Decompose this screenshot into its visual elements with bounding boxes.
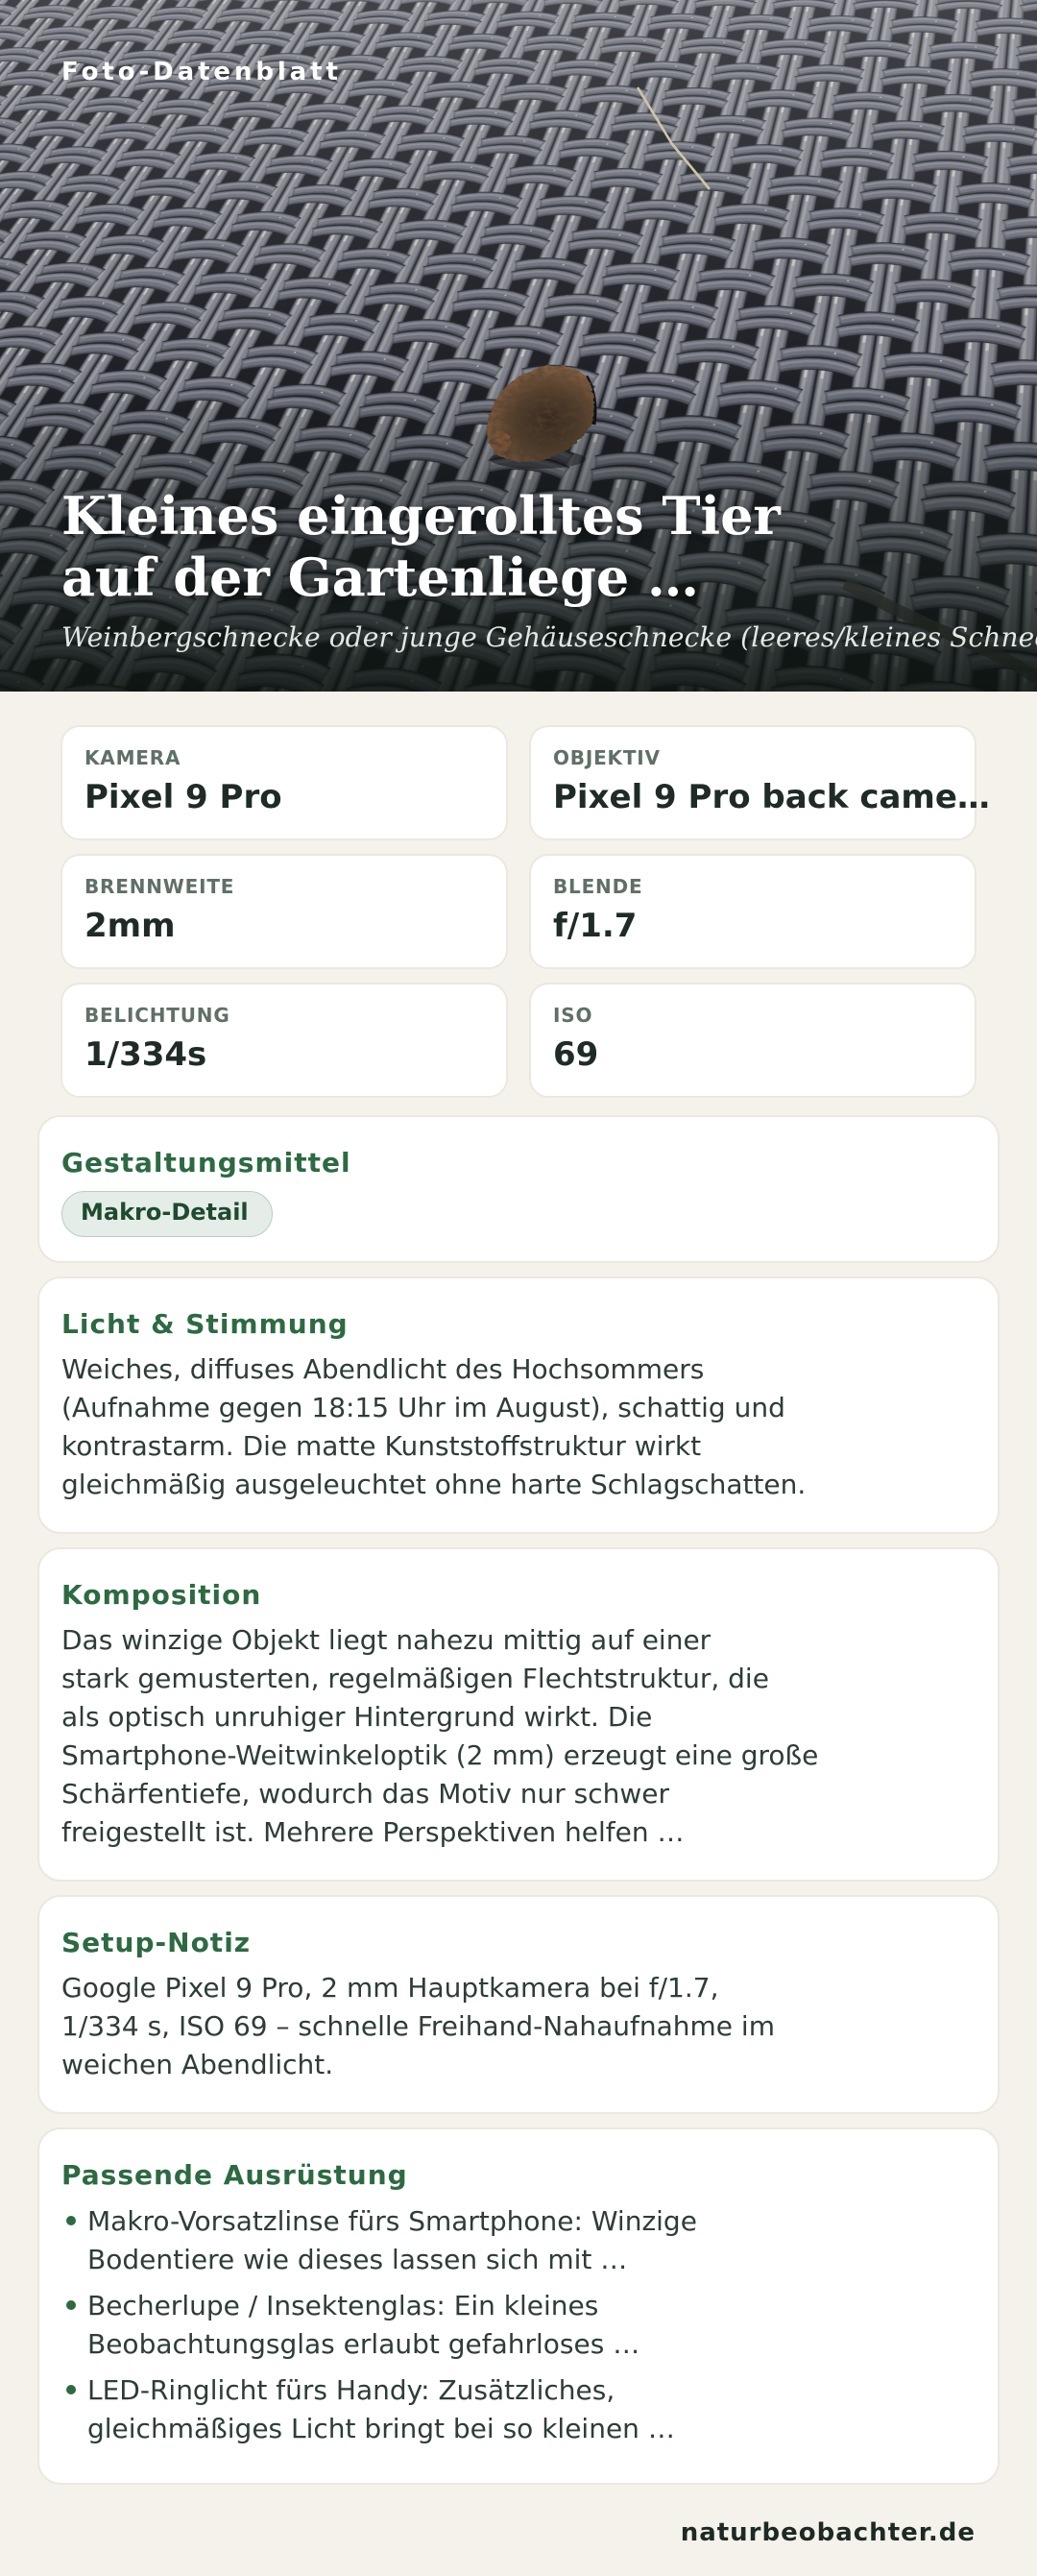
photo lighting haze — [0, 0, 1037, 692]
spec card: Brennweite — [60, 854, 508, 969]
spec card: Objektiv: OBJEKTIV — [553, 746, 661, 769]
heading: Komposition — [61, 1579, 261, 1611]
heading: Setup-Notiz — [61, 1927, 251, 1958]
heading: Passende Ausrüstung — [61, 2159, 408, 2191]
tag pill — [61, 1191, 273, 1237]
body text: als optisch unruhiger Hintergrund wirkt. Die — [61, 1701, 652, 1733]
spec card: Objektiv — [529, 725, 977, 840]
spec card: ISO: ISO — [553, 1004, 592, 1027]
list item 1: Bodentiere wie dieses lassen sich mit … — [87, 2244, 627, 2275]
heading: Licht & Stimmung — [61, 1308, 349, 1340]
tag pill: Makro-Detail — [81, 1199, 249, 1226]
body text: Weiches, diffuses Abendlicht des Hochsommers — [61, 1353, 704, 1385]
body text: Google Pixel 9 Pro, 2 mm Hauptkamera bei f/1.7, — [61, 1972, 718, 2004]
body text: gleichmäßig ausgeleuchtet ohne harte Schlagschatten. — [61, 1469, 806, 1500]
bullet marker 1 — [66, 2216, 76, 2225]
list item 1: Makro-Vorsatzlinse fürs Smartphone: Winzige — [87, 2205, 697, 2237]
panel: Passende Ausrüstung — [37, 2127, 1000, 2485]
body text: (Aufnahme gegen 18:15 Uhr im August), schattig und — [61, 1392, 785, 1423]
body text: freigestellt ist. Mehrere Perspektiven helfen … — [61, 1816, 685, 1848]
footer brand: naturbeobachter.de — [681, 2518, 976, 2547]
spec card: Belichtung: BELICHTUNG — [84, 1004, 230, 1027]
spec card: Blende: f/1.7 — [553, 907, 637, 945]
spec card: Blende: BLENDE — [553, 875, 642, 898]
photo subject: snail shell and straw — [486, 86, 1035, 684]
title: Kleines eingerolltes Tier — [61, 485, 781, 547]
list item 3: gleichmäßiges Licht bringt bei so kleinen … — [87, 2413, 675, 2444]
spec card: Objektiv: Pixel 9 Pro back came… — [553, 778, 990, 816]
spec card: ISO: 69 — [553, 1035, 598, 1074]
hero photo panel — [0, 0, 1037, 692]
spec card: Belichtung: 1/334s — [84, 1035, 206, 1074]
body text — [61, 1353, 806, 1500]
list item 1 — [87, 2205, 697, 2275]
photo: woven lounger texture — [0, 0, 1037, 692]
panel: Setup-Notiz — [37, 1895, 1000, 2114]
body text: Das winzige Objekt liegt nahezu mittig auf einer — [61, 1624, 711, 1656]
bullet marker 3 — [66, 2385, 76, 2394]
spec card: Belichtung — [60, 983, 508, 1098]
body text: Schärfentiefe, wodurch das Motiv nur schwer — [61, 1778, 669, 1810]
list item 2 — [87, 2290, 639, 2360]
body text — [61, 1624, 818, 1848]
body text: weichen Abendlicht. — [61, 2049, 333, 2080]
heading: Gestaltungsmittel — [61, 1147, 351, 1179]
spec card: Brennweite: BRENNWEITE — [84, 875, 234, 898]
spec card: Kamera — [60, 725, 508, 840]
spec card: ISO — [529, 983, 977, 1098]
list item 2: Becherlupe / Insektenglas: Ein kleines — [87, 2290, 598, 2321]
spec card: Kamera: Pixel 9 Pro — [84, 778, 282, 816]
panel: Komposition — [37, 1547, 1000, 1882]
list item 3: LED-Ringlicht fürs Handy: Zusätzliches, — [87, 2374, 615, 2406]
title: auf der Gartenliege … — [61, 547, 699, 608]
spec card: Brennweite: 2mm — [84, 907, 176, 945]
panel: Licht & Stimmung — [37, 1276, 1000, 1534]
body text: stark gemusterten, regelmäßigen Flechtstruktur, die — [61, 1663, 769, 1694]
body text: 1/334 s, ISO 69 – schnelle Freihand-Nahaufnahme im — [61, 2010, 775, 2042]
eyebrow: Foto-Datenblatt: Foto-Datenblatt — [61, 58, 342, 86]
bullet marker 2 — [66, 2300, 76, 2310]
dark gradient overlay — [0, 0, 1037, 692]
spec card: Kamera: KAMERA — [84, 746, 181, 769]
panel: Gestaltungsmittel — [37, 1115, 1000, 1263]
body text — [61, 1972, 775, 2080]
list item 3 — [87, 2374, 675, 2444]
list item 2: Beobachtungsglas erlaubt gefahrloses … — [87, 2328, 639, 2360]
body text: Smartphone-Weitwinkeloptik (2 mm) erzeugt eine große — [61, 1739, 818, 1771]
body text: kontrastarm. Die matte Kunststoffstruktur wirkt — [61, 1430, 701, 1462]
title — [61, 485, 784, 610]
spec card: Blende — [529, 854, 977, 969]
